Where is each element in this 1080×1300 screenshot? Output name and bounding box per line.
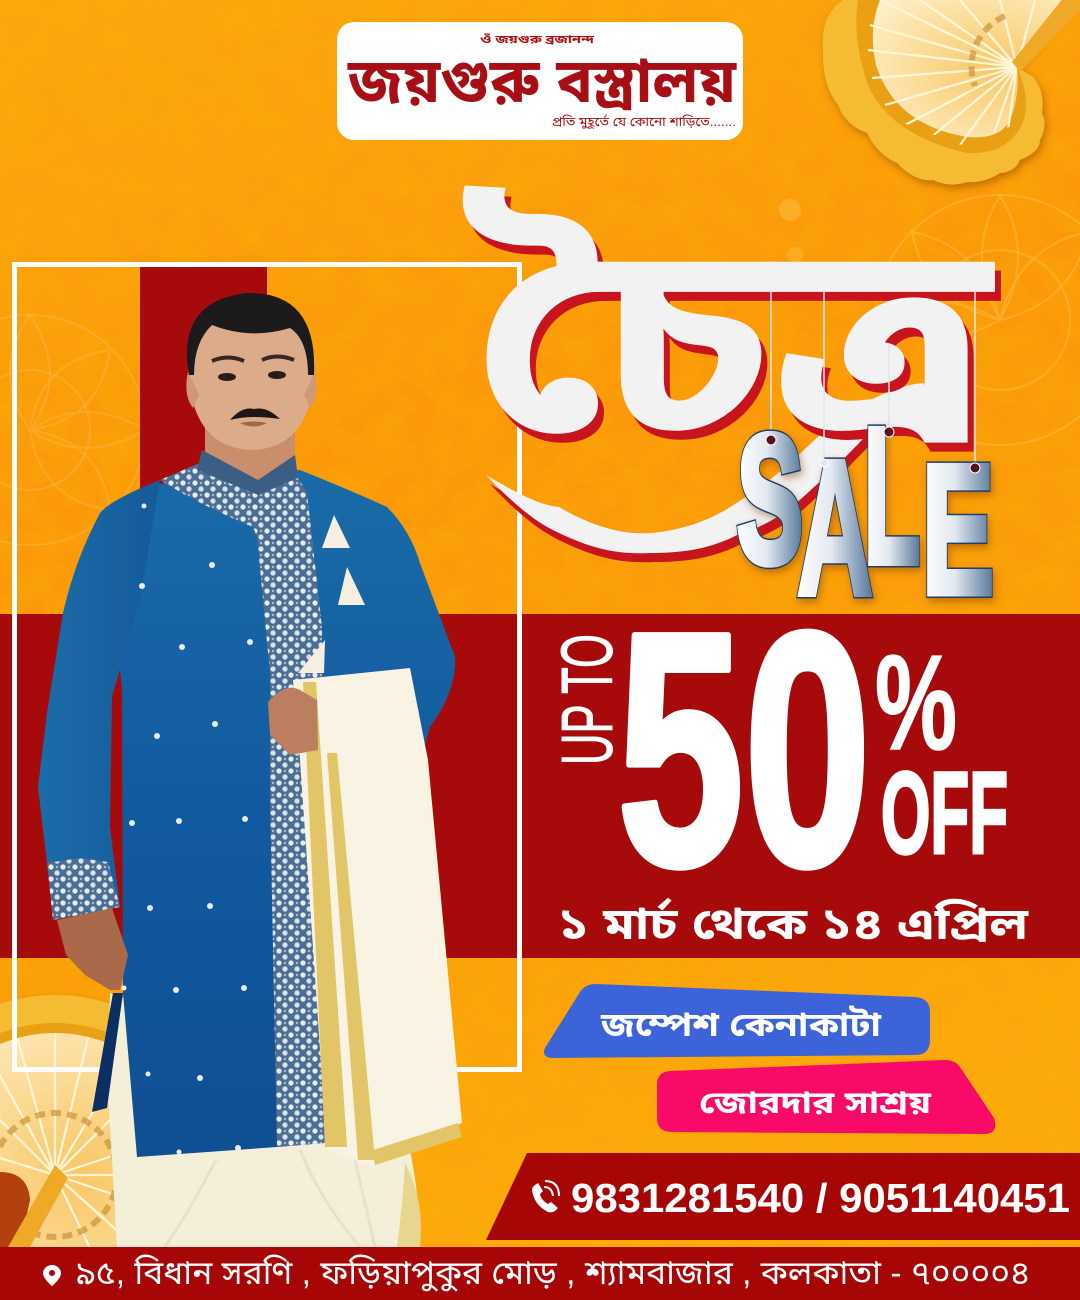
- lips: [240, 422, 267, 426]
- dhoti: [108, 993, 420, 1247]
- SALE hanging letters: L: [864, 388, 920, 603]
- hanging strings: [771, 290, 975, 468]
- heading: chaitra calligraphy: চৈত্র: [462, 183, 995, 489]
- letter E: [922, 426, 994, 632]
- fan handle: [1012, 0, 1080, 72]
- left hand: [57, 908, 128, 990]
- white frame: [14, 264, 520, 1070]
- right hand: [268, 688, 318, 755]
- hair: [187, 293, 314, 375]
- location icon: [43, 1265, 61, 1286]
- neck: [205, 425, 295, 484]
- letter S: S: [737, 397, 803, 601]
- phone bar: [486, 1153, 1080, 1240]
- kurta torso: [115, 470, 455, 1157]
- fan, bottom left: [0, 995, 117, 1247]
- address bar: [0, 1247, 1080, 1300]
- kurta buttis: [122, 504, 253, 1154]
- fan paper: [873, 0, 1072, 137]
- letter A: A: [797, 420, 873, 635]
- letter E: E: [922, 426, 994, 632]
- moustache: [230, 408, 280, 420]
- logo small line: ওঁ জয়গুরু ব্রজানন্দ: [480, 32, 595, 46]
- phone numbers: 9831281540 / 9051140451: [571, 1175, 1070, 1221]
- shawl gold border: [303, 682, 462, 1165]
- fan dashed ring: [971, 16, 1005, 86]
- discount: up to: UP TO: [548, 634, 628, 765]
- shawl: [293, 668, 462, 1167]
- fan gold ring: [856, 0, 1072, 153]
- phone icon: [532, 1181, 559, 1212]
- fan, top right: [823, 0, 1080, 185]
- blue badge: [544, 984, 930, 1058]
- letter L: [864, 388, 920, 603]
- blue badge text: জম্পেশ কেনাকাটা: [600, 1006, 882, 1043]
- ears: [186, 372, 317, 408]
- pink badge: [657, 1060, 995, 1134]
- pink badge text: জোরদার সাশ্রয়: [699, 1085, 932, 1120]
- collar: [197, 450, 298, 495]
- letter S: S: [737, 397, 803, 601]
- embroidered placket: [160, 462, 325, 1147]
- SALE hanging letters: [737, 388, 994, 635]
- mandala pattern, left: [0, 315, 145, 545]
- kurta back flap: [92, 993, 123, 1112]
- red band: [0, 614, 1080, 958]
- mandala pattern, upper right: [779, 195, 1080, 445]
- letter S: [737, 397, 803, 601]
- letter A: [797, 420, 873, 635]
- sale dates: ১ মার্চ থেকে ১৪ এপ্রিল: [558, 898, 1029, 949]
- discount: percent: %: [875, 627, 957, 778]
- letter E: E: [922, 426, 994, 632]
- string holes: [766, 427, 980, 473]
- tassels: [298, 515, 365, 673]
- face: [188, 310, 315, 450]
- red vertical strip: [140, 267, 267, 615]
- discount: 50: 50: [617, 564, 871, 935]
- heading: chaitra calligraphy: চৈত্র: [468, 192, 1001, 498]
- fan scalloped rim: [823, 0, 1072, 185]
- logo name: জয়গুরু বস্ত্রালয়: [347, 47, 737, 116]
- eyes and eyebrows: [212, 356, 294, 381]
- letter A: A: [797, 420, 873, 635]
- logo panel: [337, 22, 743, 140]
- logo tagline: প্রতি মুহূর্তে যে কোনো শাড়িতে.......: [552, 114, 736, 130]
- heading swoosh: [486, 383, 963, 562]
- kurta left arm: [38, 480, 160, 907]
- sleeve cuff: [47, 858, 120, 920]
- man: [38, 293, 462, 1247]
- SALE hanging letters: L: [864, 388, 920, 603]
- address text: ৯৫, বিধান সরণি , ফড়িয়াপুকুর মোড় , শ্যামবাজার , কলকাতা - ৭০০০০৪: [76, 1253, 1030, 1292]
